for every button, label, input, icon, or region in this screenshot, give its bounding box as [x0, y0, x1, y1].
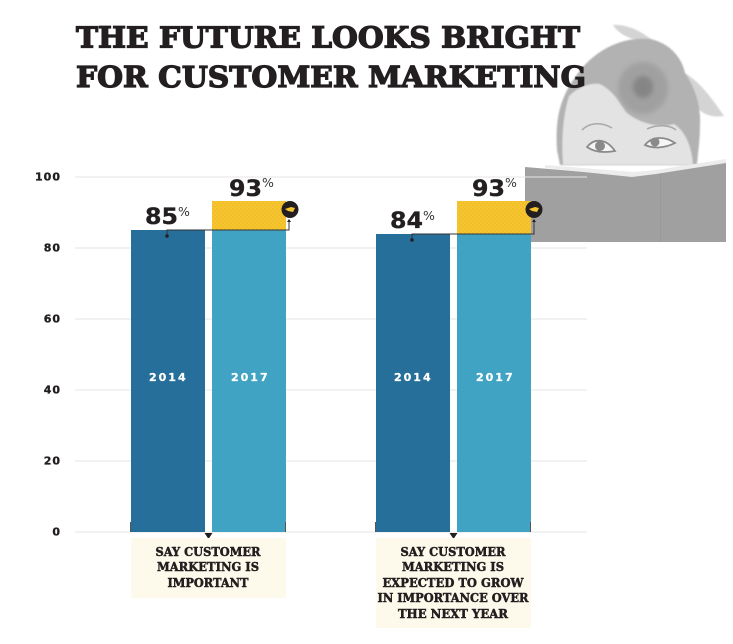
bar: 2014 84 percent: %	[423, 208, 435, 223]
chart: y axis and gridlines: 0	[52, 526, 61, 538]
bar: 2017 93 percent: 93	[472, 177, 505, 202]
caption	[376, 538, 531, 628]
bar: 2017 93 percent	[212, 175, 286, 532]
caption: SAY CUSTOMER	[400, 545, 506, 559]
bar: 2014 84 percent: 2014	[394, 371, 433, 384]
marker triangle	[204, 533, 212, 539]
bar: 2014 85 percent: %	[178, 204, 190, 219]
bar: 2014 84 percent	[376, 208, 450, 532]
title	[76, 20, 586, 94]
caption: IN IMPORTANCE OVER	[378, 591, 529, 605]
caption: SAY CUSTOMER	[156, 545, 261, 559]
caption: THE NEXT YEAR	[398, 607, 509, 621]
face skin	[562, 84, 693, 165]
caption: EXPECTED TO GROW	[382, 576, 524, 590]
bar group: expected to grow in importance	[376, 175, 542, 628]
chart: y axis and gridlines	[35, 170, 587, 538]
bar group: say customer marketing is important	[130, 175, 298, 598]
eyebrows and eyes	[582, 124, 612, 130]
title: THE FUTURE LOOKS BRIGHT	[76, 20, 580, 54]
caption: MARKETING IS	[157, 560, 259, 574]
chart: y axis and gridlines: 80	[44, 242, 61, 254]
bar: 2017 93 percent: 93	[229, 177, 262, 202]
icon: pointing hand badge	[282, 201, 298, 218]
bar: 2017 93 percent	[457, 175, 531, 532]
chart: y axis and gridlines: 40	[44, 384, 61, 396]
bar: 2017 93 percent: %	[505, 175, 517, 190]
growth connector	[165, 219, 291, 238]
hair back	[557, 39, 700, 165]
axis ticks	[130, 522, 286, 532]
caption: IMPORTANT	[168, 576, 249, 590]
bar: 2017 93 percent: %	[262, 175, 274, 190]
marker triangle	[450, 533, 458, 539]
icon: pointing hand badge	[526, 201, 542, 218]
growth connector	[410, 219, 536, 242]
book	[525, 162, 726, 242]
caption: MARKETING IS	[402, 560, 504, 574]
bar: 2014 84 percent: 84	[390, 209, 423, 234]
bar: 2017 93 percent: 2017	[476, 371, 515, 384]
bar: 2017 93 percent: 2017	[231, 371, 270, 384]
axis ticks	[376, 522, 530, 532]
chart: y axis and gridlines: 20	[44, 454, 61, 468]
caption	[131, 538, 286, 598]
hair curl	[618, 62, 668, 114]
illustration: woman peeking over a book	[525, 25, 726, 242]
bar: 2014 85 percent: 85	[145, 205, 178, 230]
chart: y axis and gridlines: 60	[44, 312, 61, 326]
bar: 2014 85 percent	[131, 204, 205, 532]
title: FOR CUSTOMER MARKETING	[76, 60, 586, 94]
chart: y axis and gridlines: 100	[35, 170, 61, 184]
hair scarf bow	[613, 25, 724, 117]
bar: 2014 85 percent: 2014	[149, 371, 188, 384]
